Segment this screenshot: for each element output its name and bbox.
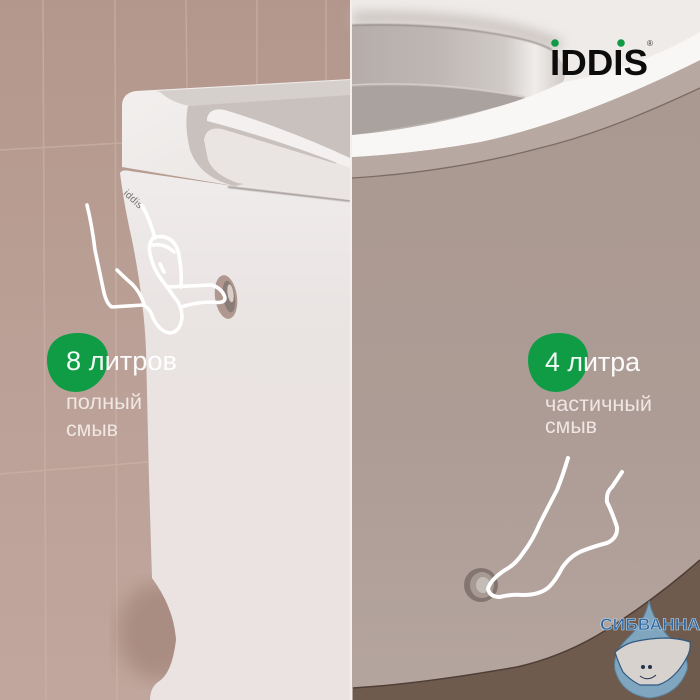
icon: foot pressing button: [488, 458, 622, 597]
icon: hand pressing button: [87, 205, 225, 333]
floor: [353, 560, 700, 700]
panel: right toilet: [352, 0, 700, 700]
panel: left cistern lid and seat: [122, 79, 350, 200]
panel: left toilet body: [120, 170, 350, 700]
callout: 4 литра: частичный: [545, 393, 652, 416]
callout: 4 литра: смыв: [545, 415, 597, 438]
rim shadow band: [352, 50, 700, 178]
callout: 8 литров: смыв: [66, 418, 118, 441]
face: [640, 665, 656, 679]
seat: [352, 0, 700, 157]
callout: 8 литров: 8 литров: [66, 346, 177, 376]
callout: 8 литров: полный: [66, 391, 142, 414]
logo: IDDIS: ®: [647, 39, 653, 48]
seat lower part: [204, 128, 350, 200]
icon: right flush button: [464, 568, 498, 602]
brand mark on cistern: iddis: [121, 188, 145, 211]
panel: left wall tiles: [0, 0, 350, 700]
drop: [615, 601, 687, 698]
icon: left flush button: [212, 274, 240, 320]
callout: 4 литра: [528, 333, 652, 438]
bathtub: [615, 638, 690, 685]
callout: 4 литра: 4 литра: [545, 347, 641, 377]
name: СИБВАННА: [600, 615, 700, 634]
seat upper edge: [207, 109, 350, 168]
divider: [350, 0, 352, 700]
bowl opening: [352, 25, 565, 135]
watermark: Сибванна: [600, 601, 700, 698]
callout: 8 литров: [47, 333, 177, 441]
logo: IDDIS: IDDIS: [550, 42, 648, 83]
shadow above bowl: [352, 18, 560, 46]
